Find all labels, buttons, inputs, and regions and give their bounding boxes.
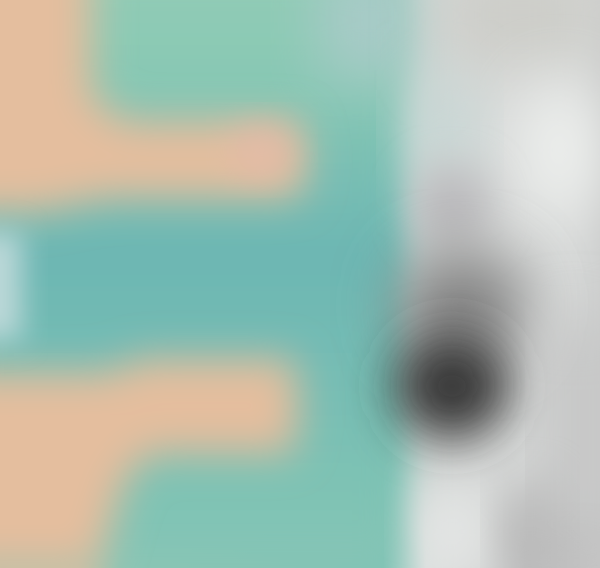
shape: pale blue-grey upper area — [408, 75, 472, 185]
panel: teal field — [0, 0, 406, 568]
shape: upper grey blob — [412, 165, 492, 245]
shape: dark blob — [394, 332, 510, 440]
shape: pink tip of upper bar — [234, 126, 290, 174]
shape: pale left-edge tab — [0, 232, 22, 340]
shape: lower mid grey column — [505, 480, 555, 568]
shape: right pale highlight — [520, 80, 600, 220]
shape: right lower grey — [550, 320, 600, 568]
shape: top right grey — [440, 0, 600, 70]
shape: top teal-grey fade — [320, 0, 420, 80]
shape: lower peach block — [0, 358, 299, 568]
shape: upper peach block — [0, 0, 306, 212]
panel: right grey field — [406, 0, 600, 520]
shape: lower pale grey column — [418, 495, 486, 568]
shape: middle grey gradient — [396, 247, 528, 363]
